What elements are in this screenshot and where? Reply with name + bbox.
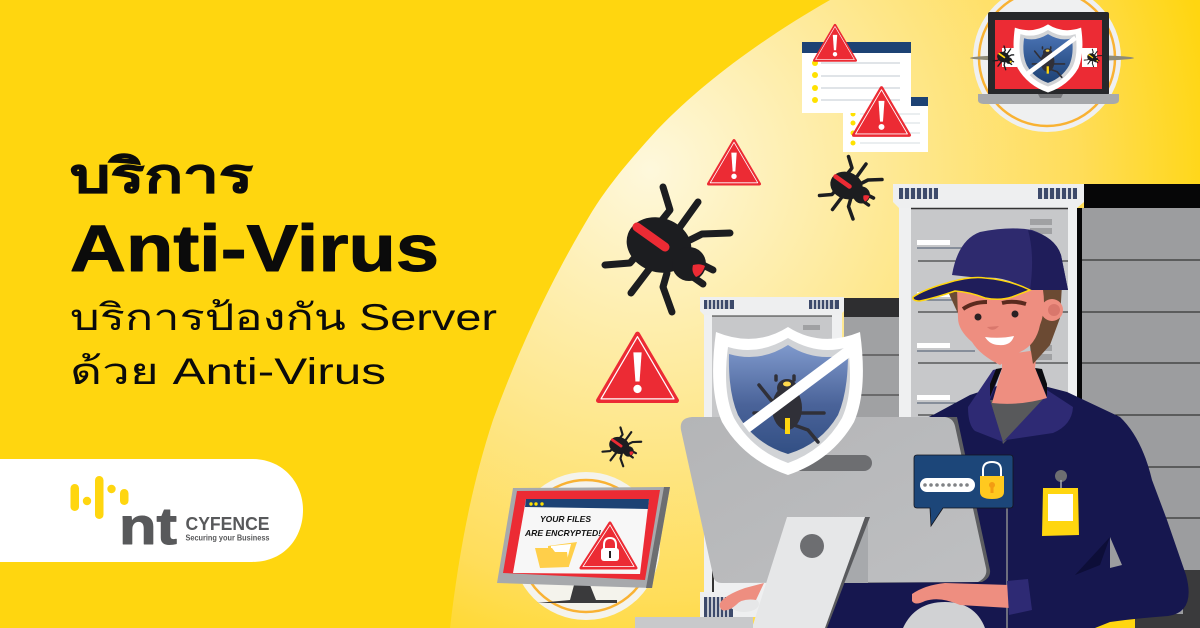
- password bubble: [914, 455, 1013, 526]
- red screen: [503, 490, 660, 580]
- zipper: [1006, 505, 1008, 628]
- logo tagline: Securing your Business: [186, 534, 270, 542]
- icon: laptop with shield: [970, 0, 1134, 132]
- icon: ransomware monitor: ARE ENCRYPTED!: [524, 528, 601, 538]
- server racks: [700, 184, 1200, 617]
- face: [957, 288, 1044, 365]
- rack short: [700, 297, 899, 617]
- nose: [987, 326, 999, 330]
- technician: [827, 228, 1189, 628]
- icon: warning middle: [709, 141, 759, 184]
- ransom message: YOUR FILES: [540, 514, 591, 524]
- collar: [968, 368, 1073, 442]
- stand: [752, 517, 870, 628]
- keyboard: [635, 617, 753, 628]
- heading line 2: Anti-Virus: [70, 211, 439, 285]
- computer monitor: [681, 417, 990, 628]
- logo wordmark nt: nt: [119, 498, 177, 556]
- mouse: [903, 602, 985, 628]
- icon: ransomware monitor: [497, 472, 670, 620]
- padlock: [980, 462, 1004, 499]
- icon: bug small: [602, 427, 641, 466]
- stand: [537, 585, 617, 603]
- logo mark: [70, 476, 128, 519]
- icon: warning documents: [802, 25, 928, 152]
- sleeve cuff: [1007, 579, 1032, 615]
- hand left: [720, 583, 764, 610]
- subtitle line 2: ด้วย Anti-Virus: [70, 351, 386, 392]
- heading line 1: บริการ: [70, 149, 253, 202]
- left mouse: [729, 596, 759, 612]
- lock warning: [581, 523, 636, 568]
- warning large: [854, 88, 909, 135]
- radial light panel: [450, 0, 1200, 628]
- icon: warning left: [598, 334, 677, 401]
- jacket: [827, 385, 1189, 628]
- smile: [985, 336, 1014, 345]
- logo wordmark CYFENCE: CYFENCE: [186, 514, 270, 534]
- bottom right floor: [1110, 570, 1200, 628]
- rack tall: [893, 184, 1084, 423]
- white window: [513, 499, 649, 574]
- bezel: [497, 487, 670, 588]
- document front: [802, 42, 911, 113]
- jacket sleeve shade: [1075, 537, 1110, 575]
- warning small: [814, 25, 856, 60]
- icon: bug large: [605, 187, 730, 312]
- icon: bug top: [820, 156, 882, 219]
- stand shadow: [826, 520, 868, 583]
- neck: [992, 350, 1047, 404]
- shirt: [990, 398, 1047, 444]
- ear: [1041, 299, 1063, 321]
- monitor slot: [790, 455, 872, 471]
- cap: [913, 228, 1068, 301]
- hair: [945, 285, 1062, 364]
- arm gap: [1110, 537, 1122, 568]
- dark rack right: [1077, 184, 1200, 615]
- eyebrows: [963, 302, 1026, 309]
- large shield: [713, 327, 863, 475]
- password field: [920, 478, 975, 492]
- folder: [535, 542, 577, 568]
- eyes: [974, 310, 1018, 320]
- subtitle line 1: บริการป้องกัน Server: [70, 297, 497, 338]
- hand right: [912, 583, 1010, 608]
- document back: [843, 97, 928, 152]
- shield bug: [754, 376, 824, 442]
- id badge: [1042, 470, 1079, 536]
- logo panel: [0, 459, 303, 562]
- title block: [70, 149, 497, 392]
